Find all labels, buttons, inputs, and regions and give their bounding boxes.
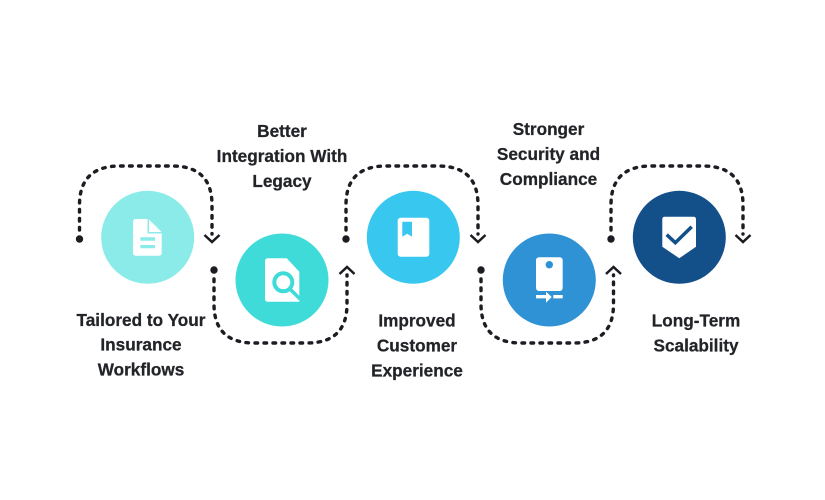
label: Long-Term Scalability: Scalability (653, 336, 739, 356)
label: Stronger Security and Compliance: Security and (497, 144, 600, 164)
label: Improved Customer Experience: Improved (378, 310, 456, 330)
circle icon: document search (236, 234, 328, 326)
label: Better Integration With Legacy: Better (257, 121, 307, 141)
label: Improved Customer Experience: Customer (377, 336, 457, 356)
label: Stronger Security and Compliance: Stronger (513, 119, 585, 139)
circle icon: shield check (633, 191, 726, 284)
step 2: legacy integration (210, 121, 354, 343)
circle icon: document (101, 191, 194, 284)
connector arc 3 (342, 166, 486, 243)
label: Tailored to Your Insurance Workflows: Tailored to Your (77, 310, 206, 330)
label: Long-Term Scalability: Long-Term (652, 310, 740, 330)
connector arc 2 (210, 266, 354, 343)
step 1: tailored workflows (76, 166, 220, 380)
connector arc 5 (607, 166, 750, 243)
label: Improved Customer Experience: Experience (371, 360, 463, 380)
step 4: security and compliance (477, 119, 621, 343)
connector arc 1 (76, 166, 220, 243)
label: Better Integration With Legacy: Legacy (252, 171, 312, 191)
step 3: customer experience (342, 166, 486, 380)
circle icon: bookmarked book (367, 191, 460, 284)
connector arc 4 (477, 266, 621, 343)
circle icon: device with arrow (503, 234, 596, 326)
label: Better Integration With Legacy: Integration With (217, 146, 347, 166)
label: Tailored to Your Insurance Workflows: Insurance (100, 334, 182, 354)
label: Tailored to Your Insurance Workflows: Workflows (98, 360, 184, 380)
label: Stronger Security and Compliance: Compliance (500, 169, 597, 189)
step 5: scalability (607, 166, 750, 356)
